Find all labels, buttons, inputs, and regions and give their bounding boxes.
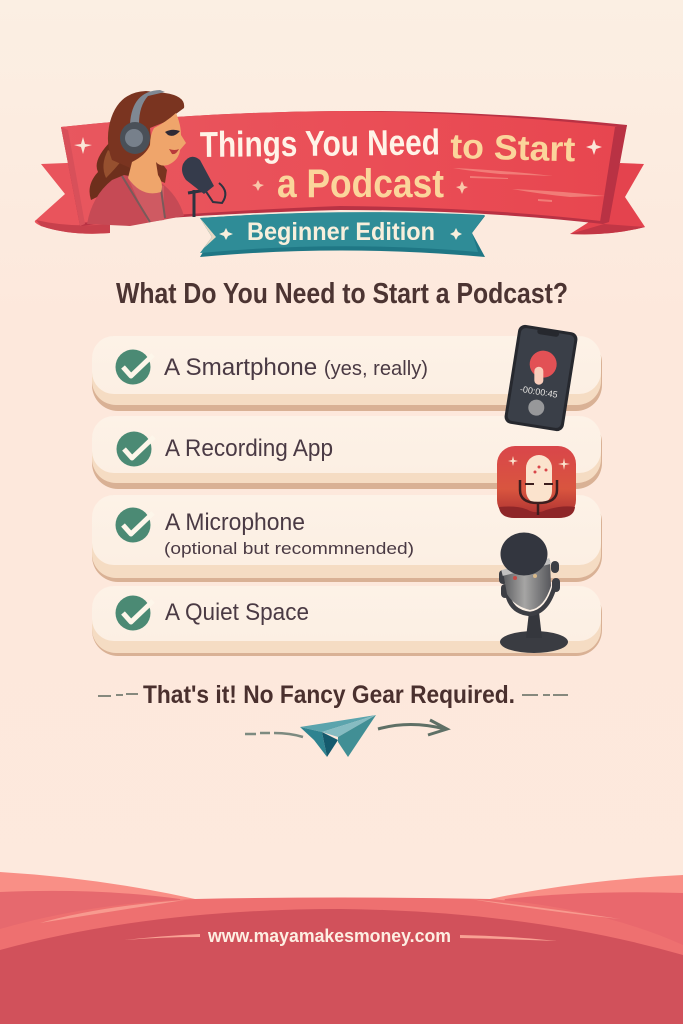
- footer waves: [0, 872, 683, 1024]
- row: smartphone: [92, 336, 602, 411]
- icon: studio microphone: [499, 532, 568, 653]
- icon: smartphone recorder: [504, 324, 578, 432]
- label: A Microphone: [165, 509, 305, 536]
- left dashes: [98, 694, 138, 696]
- teal subtitle ribbon: [200, 212, 485, 257]
- sublabel: (optional but recommnended): [164, 539, 414, 558]
- subtitle: Beginner Edition: [247, 218, 435, 246]
- row: microphone: [92, 495, 602, 582]
- icon: paper plane with trail: [245, 715, 447, 757]
- label: A Recording App: [165, 435, 333, 462]
- check icon: [116, 596, 153, 630]
- headphones: [130, 90, 165, 124]
- eye and lips: [165, 130, 180, 136]
- microphone on stand: [192, 190, 196, 217]
- left flourish: [125, 934, 200, 940]
- hair: [108, 91, 184, 183]
- right ribbon tail: [570, 163, 645, 234]
- row: quiet space: [92, 586, 602, 656]
- middle band: [0, 898, 683, 1024]
- main red ribbon: [61, 111, 627, 226]
- check icon: [116, 350, 153, 384]
- section heading: What Do You Need to Start a Podcast?: [116, 278, 568, 310]
- closing text: That's it! No Fancy Gear Required.: [143, 681, 515, 709]
- right flourish: [460, 935, 557, 941]
- label: A Quiet Space: [165, 599, 309, 626]
- website: www.mayamakesmoney.com: [207, 926, 451, 946]
- face and neck: [128, 113, 186, 193]
- paper plane: [300, 715, 376, 757]
- left wave: [0, 872, 195, 950]
- row: recording app: [92, 416, 602, 489]
- ponytail: [90, 140, 140, 200]
- arrow: [378, 720, 447, 735]
- plane trail: [245, 733, 303, 737]
- timer: -00:00:45: [519, 384, 558, 400]
- title: to Start: [450, 127, 576, 169]
- left ribbon tail: [35, 162, 110, 234]
- dark base: [0, 909, 683, 1024]
- title: a Podcast: [277, 162, 444, 206]
- title: [200, 121, 576, 206]
- label: A Smartphone (yes, really): [164, 354, 428, 381]
- check icon: [116, 432, 154, 466]
- sparkles: [74, 137, 602, 194]
- check icon: [116, 508, 153, 542]
- header banner: [35, 90, 645, 257]
- body: [87, 175, 184, 226]
- icon: recording app: [497, 446, 576, 518]
- teal ribbon sparkles: [219, 228, 462, 240]
- checklist: [92, 324, 602, 656]
- right wave: [490, 875, 683, 955]
- right dashes: [522, 694, 568, 696]
- title: Things You Need: [200, 121, 440, 165]
- illustration: host with headphones: [87, 90, 225, 226]
